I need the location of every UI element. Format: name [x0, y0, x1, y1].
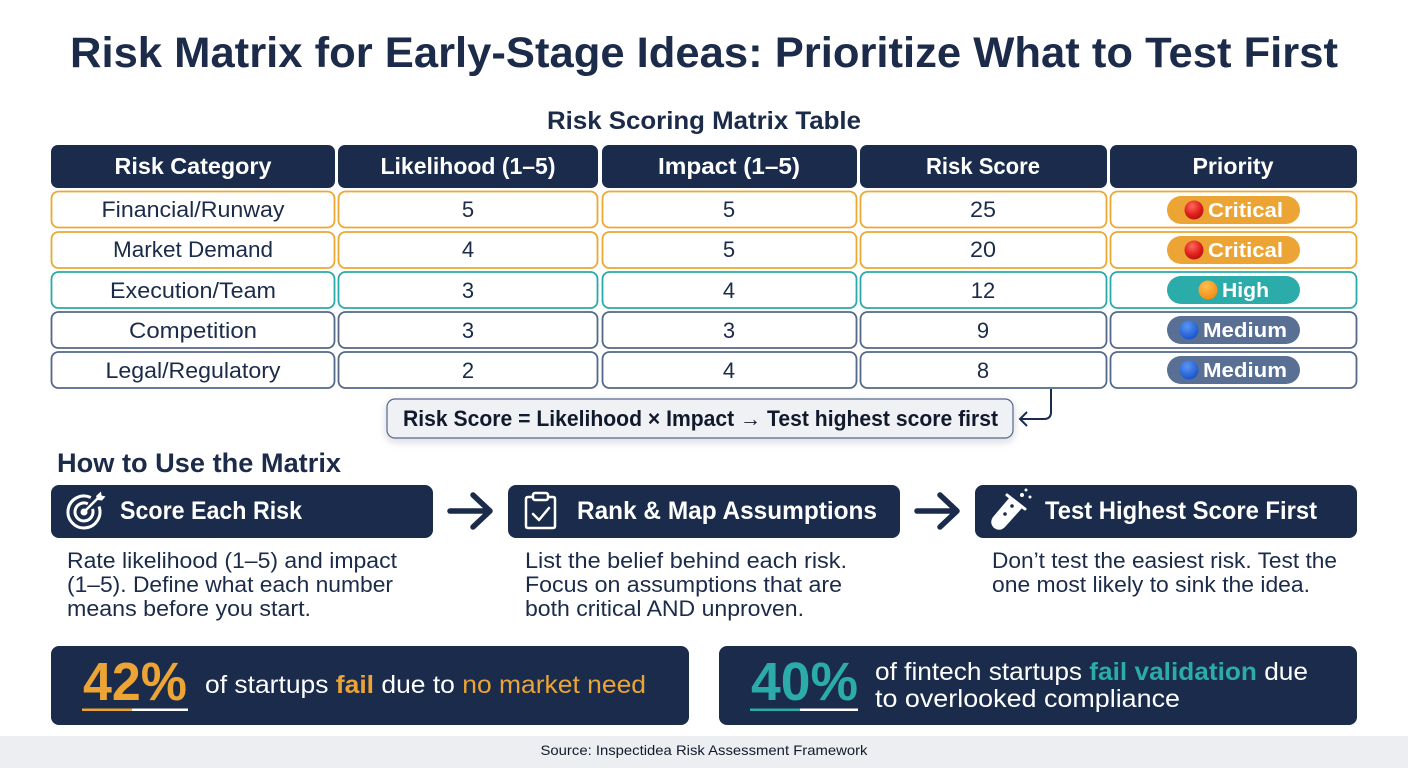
step 2 header [508, 485, 900, 538]
stat panel: 42%: 42% [83, 652, 187, 712]
badge: Medium: Medium [1203, 359, 1287, 382]
row: Financial/Runway: 5 [462, 197, 474, 222]
step 2 [508, 485, 900, 621]
how to use heading: How to Use the Matrix [57, 448, 341, 478]
row: Legal/Regulatory: Legal/Regulatory [106, 358, 280, 383]
formula callout [387, 399, 1013, 438]
table heading: Risk Scoring Matrix Table [547, 107, 861, 135]
row: Competition: 9 [977, 318, 989, 343]
step 3 header: Test Highest Score First [1045, 497, 1318, 525]
row: Competition: Competition [129, 318, 257, 343]
step 3 [975, 485, 1357, 597]
arrow: step 2 to step 3 [917, 495, 957, 527]
row: Legal/Regulatory: 8 [977, 358, 989, 383]
table header row [51, 145, 1357, 188]
title: Risk Matrix for Early-Stage Ideas: Prioritize What to Test First [70, 29, 1338, 77]
badge: Critical: Critical [1208, 199, 1283, 222]
table header row: Priority [1192, 153, 1274, 179]
footer bar: Source: Inspectidea Risk Assessment Framework [540, 742, 869, 758]
row: Execution/Team: Execution/Team [110, 278, 276, 303]
icon: clipboard [526, 493, 555, 528]
row: Legal/Regulatory: 4 [723, 358, 735, 383]
step 3 header [975, 485, 1357, 538]
row: Financial/Runway: 25 [970, 197, 996, 222]
stat panel: 40%: of fintech startups fail validation due [875, 658, 1308, 686]
stat panel: 42% [51, 646, 689, 725]
badge: Medium [1167, 356, 1300, 384]
stat panel: 40% [719, 646, 1357, 725]
row: Market Demand: 5 [723, 237, 735, 262]
icon: target [68, 492, 106, 528]
row: Financial/Runway: 5 [723, 197, 735, 222]
step 1 header: Score Each Risk [120, 497, 302, 525]
arrow: step 1 to step 2 [450, 495, 490, 527]
step 2 description: Focus on assumptions that are [525, 572, 842, 597]
step 1 header [51, 485, 433, 538]
step 1 [51, 485, 433, 621]
table header row: Impact (1–5) [658, 153, 800, 179]
step 3 description [992, 548, 1337, 597]
step 2 description: List the belief behind each risk. [525, 548, 847, 573]
badge: Critical [1167, 236, 1300, 264]
row: Financial/Runway [52, 192, 1356, 228]
table header row: Risk Score [926, 153, 1040, 179]
stat panel: 40%: to overlooked compliance [875, 685, 1180, 713]
step 1 description: (1–5). Define what each number [67, 572, 394, 597]
row: Market Demand: 20 [970, 237, 996, 262]
row: Competition [52, 312, 1356, 348]
step 1 description: means before you start. [67, 596, 311, 621]
row: Legal/Regulatory [52, 352, 1356, 388]
row: Legal/Regulatory: 2 [462, 358, 474, 383]
step 2 description [525, 548, 847, 621]
badge: High [1167, 276, 1300, 304]
step 2 description: both critical AND unproven. [525, 596, 804, 621]
arrow: risk score to formula [1020, 389, 1051, 426]
risk scoring table [51, 145, 1357, 388]
stat panel: 42%: of startups fail due to no market need [205, 671, 646, 699]
stat panel: 40%: 40% [751, 652, 858, 712]
badge: Critical: Critical [1208, 239, 1283, 262]
badge: Medium: Medium [1203, 319, 1287, 342]
badge: High: High [1222, 279, 1269, 302]
row: Competition: 3 [462, 318, 474, 343]
table header row: Likelihood (1–5) [380, 153, 556, 179]
step 2 header: Rank & Map Assumptions [577, 497, 877, 525]
row: Competition: 3 [723, 318, 735, 343]
footer bar [0, 736, 1408, 768]
row: Execution/Team [52, 272, 1356, 308]
step 1 description [67, 548, 398, 621]
row: Financial/Runway: Financial/Runway [102, 197, 284, 222]
row: Execution/Team: 3 [462, 278, 474, 303]
row: Market Demand: 4 [462, 237, 474, 262]
step 3 description: Don’t test the easiest risk. Test the [992, 548, 1337, 573]
row: Execution/Team: 12 [971, 278, 995, 303]
table header row: Risk Category [114, 153, 272, 179]
formula callout: Risk Score = Likelihood × Impact → Test highest score first [403, 406, 999, 431]
icon: test tube [991, 488, 1032, 530]
step 3 description: one most likely to sink the idea. [992, 572, 1310, 597]
badge: Critical [1167, 196, 1300, 224]
row: Execution/Team: 4 [723, 278, 735, 303]
step 1 description: Rate likelihood (1–5) and impact [67, 548, 398, 573]
badge: Medium [1167, 316, 1300, 344]
row: Market Demand [52, 232, 1356, 268]
row: Market Demand: Market Demand [113, 237, 273, 262]
